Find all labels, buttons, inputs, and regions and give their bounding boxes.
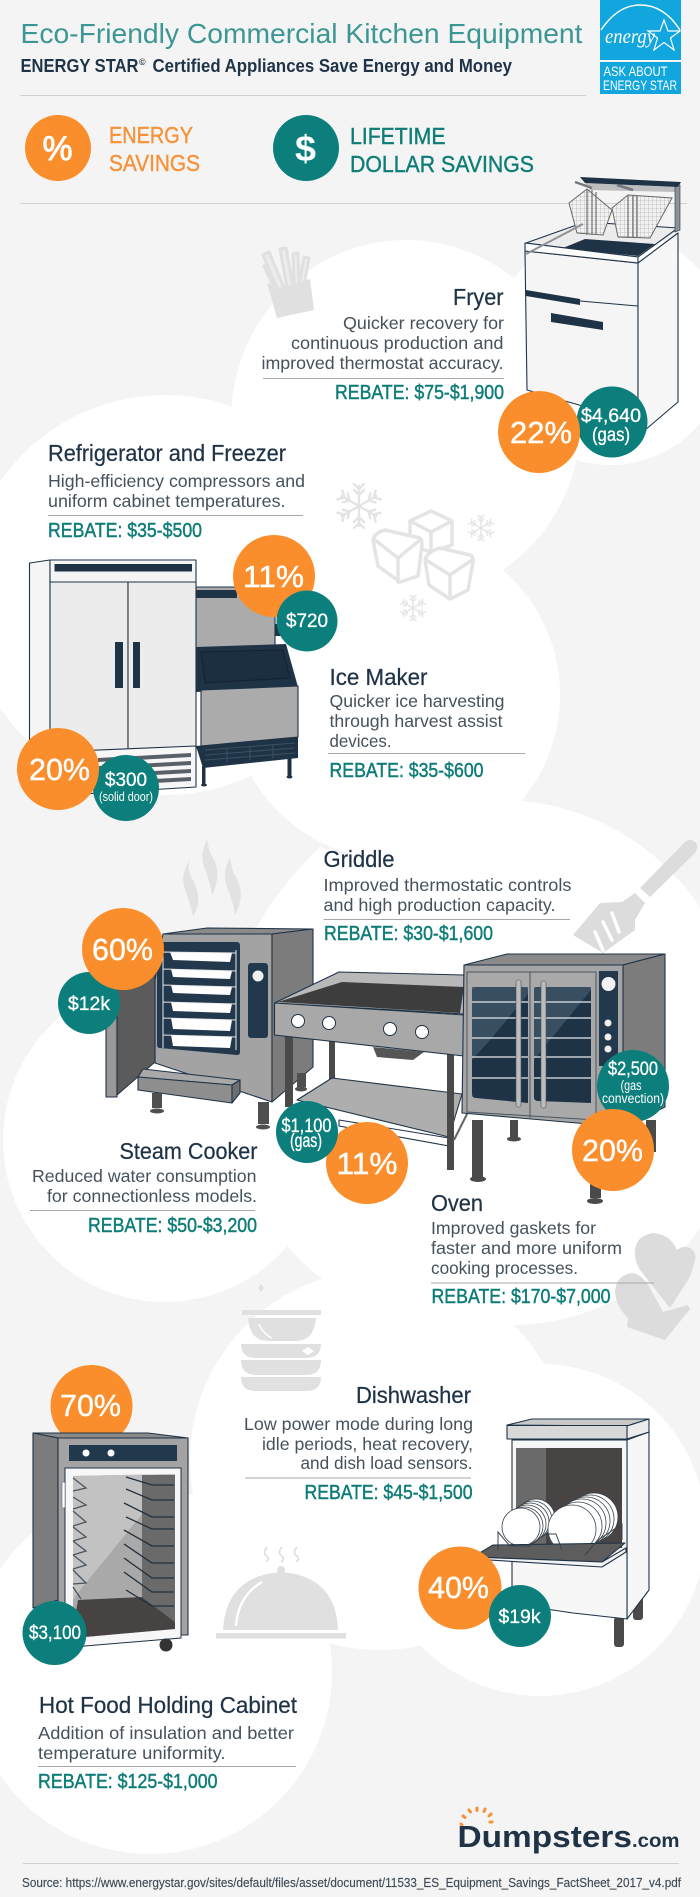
- subtitle: Certified Appliances Save Energy and Money: [152, 56, 512, 76]
- item: griddle text: [324, 846, 572, 945]
- icon: ice cubes: [373, 511, 473, 599]
- item: hot food holding cabinet text: Hot Food Holding Cabinet: [39, 1692, 298, 1718]
- badge: griddle dollar savings: [276, 1101, 338, 1163]
- item: dishwasher text: and dish load sensors.: [300, 1453, 472, 1473]
- badge: refrigerator energy savings: 20%: [29, 752, 90, 787]
- subtitle: ©: [139, 57, 146, 67]
- item: fryer text: Fryer: [453, 284, 504, 310]
- item: griddle text: REBATE: $30-$1,600: [324, 923, 493, 945]
- logo: energy star: ASK ABOUT: [604, 63, 668, 79]
- legend: energy savings: [25, 115, 200, 181]
- equipment: fryer: [525, 177, 681, 436]
- badge: dishwasher dollar savings: [489, 1585, 551, 1647]
- badge: steam cooker energy and dollar savings: $12k: [68, 994, 111, 1015]
- logo: energy star: [600, 0, 681, 94]
- subtitle: ENERGY STAR: [20, 56, 138, 76]
- item: steam cooker text: for connectionless models.: [47, 1186, 257, 1206]
- item: fryer text: improved thermostat accuracy.: [262, 353, 504, 373]
- item: refrigerator text: uniform cabinet temperatures.: [48, 491, 286, 511]
- item: ice maker text: REBATE: $35-$600: [330, 760, 484, 782]
- badge: fryer dollar savings: (gas): [592, 425, 630, 446]
- badge: dishwasher dollar savings: $19k: [498, 1607, 541, 1628]
- item: fryer text: continuous production and: [291, 333, 504, 353]
- item: fryer text: REBATE: $75-$1,900: [335, 382, 504, 404]
- equipment: oven: [462, 954, 665, 1204]
- icon: snowflakes: [337, 484, 494, 621]
- badge: fryer dollar savings: $4,640: [581, 406, 641, 427]
- badge: oven dollar savings: [597, 1050, 669, 1122]
- icon: dishes: [241, 1284, 321, 1391]
- badge: refrigerator dollar savings: (solid door): [99, 790, 153, 804]
- item: refrigerator text: High-efficiency compressors and: [48, 471, 305, 491]
- badge: refrigerator dollar savings: $300: [105, 770, 147, 791]
- item: steam cooker text: REBATE: $50-$3,200: [88, 1215, 257, 1237]
- logo: dumpsters.com: Dumpsters: [458, 1819, 632, 1854]
- item: oven text: [431, 1190, 654, 1308]
- badge: oven energy savings: 20%: [582, 1133, 643, 1168]
- badge: oven energy savings: [572, 1109, 654, 1191]
- item: hot food holding cabinet text: [38, 1692, 298, 1793]
- legend: lifetime dollar savings: DOLLAR SAVINGS: [350, 151, 534, 177]
- item: oven text: faster and more uniform: [431, 1238, 622, 1258]
- badge: dishwasher energy savings: 40%: [428, 1570, 489, 1605]
- item: ice maker text: Quicker ice harvesting: [330, 691, 504, 711]
- badge: holding cabinet energy savings: 70%: [60, 1388, 121, 1423]
- logo: dumpsters.com: .com: [632, 1831, 680, 1852]
- legend: energy savings: %: [42, 130, 72, 168]
- item: fryer text: Quicker recovery for: [343, 313, 504, 333]
- item: hot food holding cabinet text: REBATE: $125-$1,000: [38, 1771, 218, 1793]
- item: ice maker text: [328, 664, 525, 782]
- badge: holding cabinet dollar savings: $3,100: [29, 1623, 81, 1644]
- item: steam cooker text: Reduced water consumption: [32, 1166, 256, 1186]
- item: refrigerator text: [48, 440, 305, 542]
- badge: ice maker energy savings: 11%: [243, 559, 304, 594]
- item: oven text: Improved gaskets for: [431, 1218, 596, 1238]
- badge: griddle energy savings: 11%: [336, 1146, 398, 1181]
- badge: refrigerator dollar savings: [93, 755, 159, 821]
- badge: steam cooker energy and dollar savings: 60%: [92, 932, 153, 967]
- equipment: refrigerator: [30, 560, 196, 796]
- subtitle: [20, 56, 512, 76]
- item: steam cooker text: Steam Cooker: [120, 1138, 258, 1164]
- equipment: griddle: [274, 972, 470, 1170]
- badge: holding cabinet energy savings: [50, 1365, 132, 1447]
- title: Eco-Friendly Commercial Kitchen Equipment: [20, 18, 583, 49]
- legend: energy savings: ENERGY: [109, 122, 193, 148]
- item: dishwasher text: idle periods, heat recovery,: [262, 1434, 473, 1454]
- item: griddle text: Griddle: [324, 846, 394, 872]
- badge: ice maker dollar savings: [276, 590, 338, 652]
- badge: fryer energy savings: [498, 391, 580, 473]
- item: ice maker text: devices.: [330, 731, 392, 751]
- badge: fryer energy savings: 22%: [510, 415, 572, 450]
- item: hot food holding cabinet text: Addition of insulation and better: [38, 1723, 294, 1743]
- item: hot food holding cabinet text: temperature uniformity.: [38, 1743, 226, 1763]
- badge: oven dollar savings: $2,500: [608, 1059, 658, 1080]
- badge: steam cooker energy and dollar savings: [58, 908, 164, 1034]
- item: dishwasher text: Dishwasher: [356, 1382, 471, 1408]
- badge: ice maker dollar savings: $720: [286, 611, 328, 632]
- icon: spatula: [573, 840, 697, 953]
- item: griddle text: and high production capacity.: [324, 895, 556, 915]
- badge: oven dollar savings: convection): [602, 1091, 664, 1106]
- legend: lifetime dollar savings: [273, 115, 534, 181]
- item: oven text: Oven: [431, 1190, 483, 1216]
- item: oven text: cooking processes.: [431, 1258, 578, 1278]
- badge: griddle dollar savings: (gas): [290, 1131, 322, 1152]
- equipment: dishwasher: [473, 1419, 649, 1647]
- item: ice maker text: Ice Maker: [330, 664, 428, 690]
- legend: lifetime dollar savings: LIFETIME: [350, 123, 446, 149]
- item: fryer text: [262, 284, 504, 404]
- logo: energy star: energy: [605, 24, 656, 48]
- icon: steam: [183, 839, 241, 917]
- badge: oven dollar savings: (gas: [620, 1078, 642, 1093]
- icon: cloche: [216, 1547, 346, 1638]
- logo: dumpsters.com: [458, 1808, 680, 1854]
- item: griddle text: Improved thermostatic controls: [324, 875, 572, 895]
- item: refrigerator text: Refrigerator and Freezer: [48, 440, 286, 466]
- badge: dishwasher energy savings: [418, 1546, 502, 1630]
- item: oven text: REBATE: $170-$7,000: [432, 1286, 610, 1308]
- legend: lifetime dollar savings: $: [295, 128, 316, 169]
- equipment: steam cooker: [106, 928, 313, 1130]
- item: dishwasher text: REBATE: $45-$1,500: [304, 1482, 472, 1504]
- item: dishwasher text: [244, 1382, 473, 1504]
- icon: fries: [263, 248, 314, 318]
- badge: holding cabinet dollar savings: [22, 1601, 86, 1665]
- icon: oven mitts: [615, 1233, 695, 1340]
- item: refrigerator text: REBATE: $35-$500: [48, 520, 202, 542]
- item: ice maker text: through harvest assist: [330, 711, 503, 731]
- equipment: ice maker: [196, 587, 298, 786]
- badge: griddle dollar savings: $1,100: [282, 1116, 332, 1137]
- item: dishwasher text: Low power mode during long: [244, 1414, 473, 1434]
- equipment: hot food holding cabinet: [33, 1433, 188, 1652]
- item: steam cooker text: [30, 1138, 258, 1237]
- legend: energy savings: SAVINGS: [109, 150, 200, 176]
- badge: refrigerator energy savings: [17, 728, 99, 810]
- badge: ice maker energy savings: [233, 535, 315, 617]
- badge: griddle energy savings: [326, 1122, 408, 1204]
- badge: fryer dollar savings: [576, 386, 648, 458]
- logo: energy star: ENERGY STAR: [603, 77, 677, 93]
